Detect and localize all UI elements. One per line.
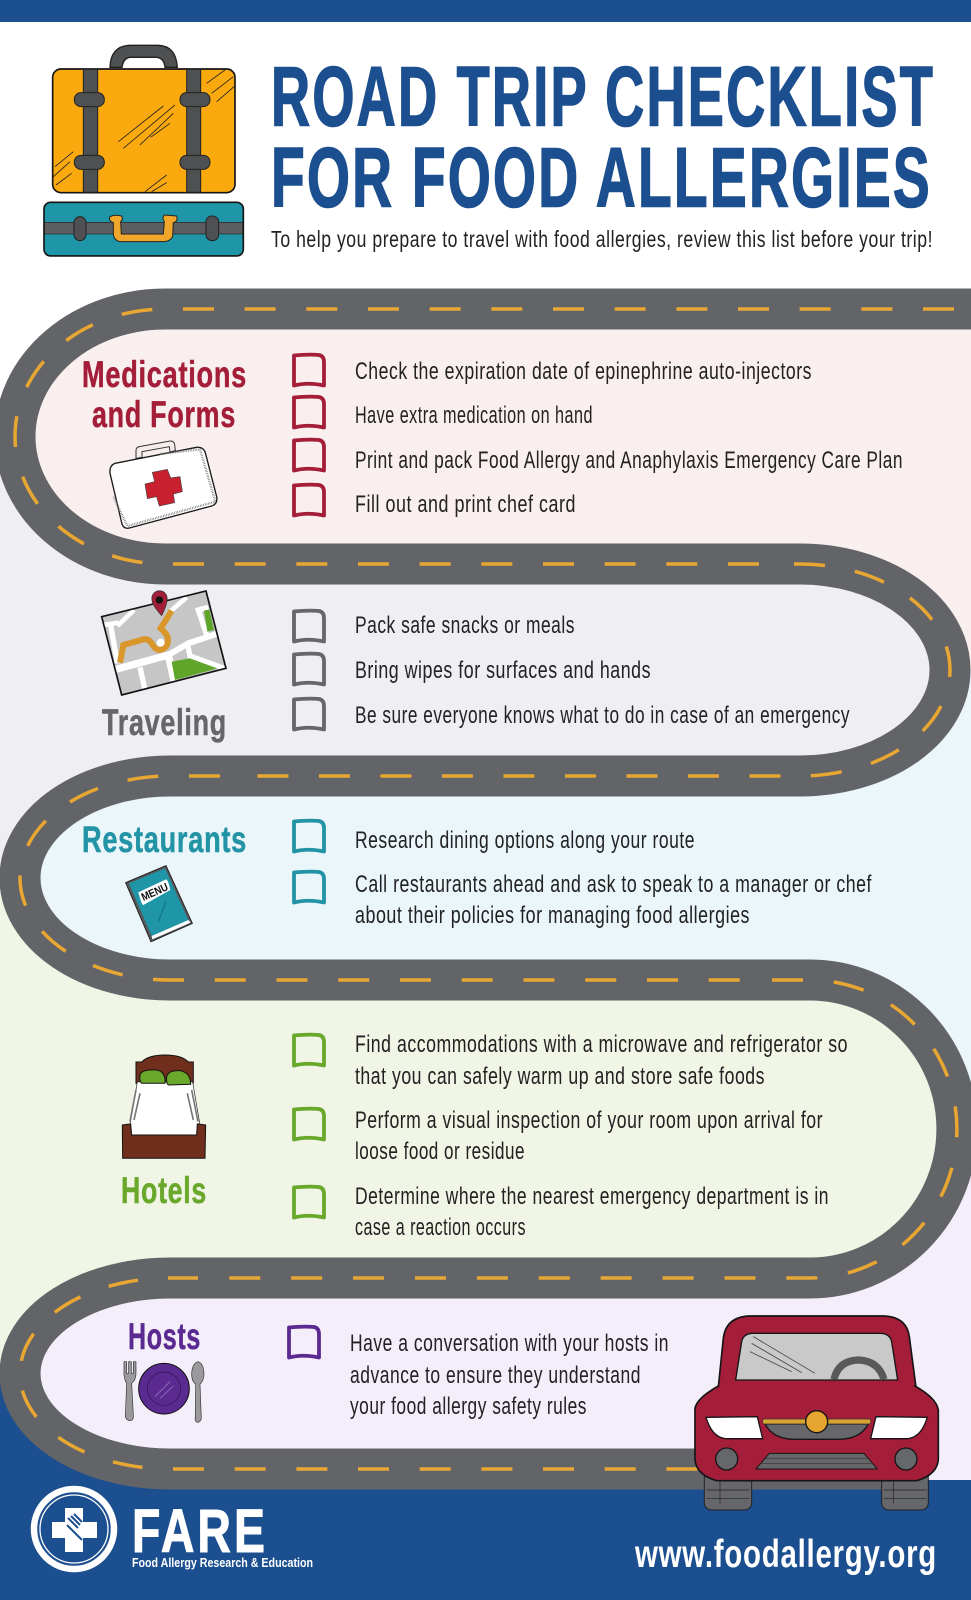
logo: FARE wordmark: Food Allergy Research & Education [132, 1555, 313, 1570]
checklist: hotels: that you can safely warm up and store safe foods [355, 1064, 765, 1090]
icon: map with pin [102, 591, 227, 695]
logo: FARE wordmark: FARE [132, 1497, 268, 1565]
checklist: hotels: loose food or residue [355, 1139, 525, 1165]
logo: FARE emblem [34, 1489, 114, 1569]
heading: medications and forms: and Forms [92, 394, 236, 435]
checklist: medications: Check the expiration date of epinephrine auto-injectors [355, 359, 812, 385]
checklist: hosts: your food allergy safety rules [350, 1394, 587, 1420]
background: restaurants band [20, 670, 971, 1129]
checklist: hotels: case a reaction occurs [355, 1215, 526, 1241]
checklist: restaurants: about their policies for managing food allergies [355, 903, 750, 929]
headlights [706, 1417, 927, 1439]
windshield [736, 1333, 898, 1380]
icon: plate with fork and spoon [124, 1362, 204, 1422]
heading: medications and forms [82, 354, 247, 435]
icon: red car [695, 1316, 938, 1510]
checklist: hosts: Have a conversation with your hosts in [350, 1331, 669, 1357]
heading: hosts: Hosts [128, 1316, 201, 1357]
background: hosts band [20, 1129, 971, 1480]
icon: menu book [126, 866, 192, 942]
checkboxes: medications [294, 355, 324, 516]
car wheels [704, 1477, 928, 1510]
background: medications band [15, 309, 971, 670]
checkboxes: restaurants [294, 821, 324, 902]
heading: restaurants: Restaurants [82, 819, 247, 860]
panel: hotels [121, 1032, 848, 1241]
checklist: hosts: advance to ensure they understand [350, 1363, 641, 1389]
icon: menu book: MENU [140, 881, 170, 904]
checkbox: hosts [289, 1327, 319, 1358]
grille and emblem [765, 1424, 868, 1439]
checklist: traveling: Bring wipes for surfaces and hands [355, 658, 651, 684]
fog lights [716, 1448, 738, 1470]
title [271, 50, 935, 224]
footer background [0, 1374, 971, 1600]
checklist: medications [355, 359, 903, 518]
icon: stacked suitcases [44, 45, 243, 256]
checklist: restaurants [355, 828, 872, 929]
panel: medications and forms [82, 354, 903, 528]
checklist: hosts [350, 1331, 669, 1420]
suitcase handle [110, 45, 177, 67]
icon: bed [122, 1055, 206, 1158]
suitcase straps and buckles [74, 69, 210, 192]
checklist: traveling: Pack safe snacks or meals [355, 613, 575, 639]
car body [695, 1386, 938, 1481]
panel: hosts [124, 1316, 669, 1422]
winding road [15, 309, 971, 1469]
lower grille [756, 1453, 877, 1469]
checklist: medications: Fill out and print chef card [355, 492, 576, 518]
teal suitcase [44, 202, 243, 256]
checklist: medications: Have extra medication on hand [355, 403, 593, 429]
icon: first aid kit [110, 441, 217, 528]
heading: medications and forms: Medications [82, 354, 247, 395]
checkboxes: traveling [294, 611, 324, 730]
checkboxes: hotels [294, 1035, 324, 1218]
heading: traveling: Traveling [102, 702, 227, 743]
car cabin [718, 1316, 916, 1387]
checklist: hotels [355, 1032, 848, 1241]
heading: hotels: Hotels [121, 1170, 207, 1211]
background: hotels band [0, 878, 957, 1374]
steering wheel [834, 1360, 884, 1379]
background: traveling band [0, 436, 950, 878]
top bar [0, 0, 971, 22]
panel: restaurants [82, 819, 872, 942]
checklist: traveling [355, 613, 850, 729]
checklist: hotels: Perform a visual inspection of your room upon arrival for [355, 1108, 823, 1134]
orange suitcase body [53, 69, 235, 193]
checklist: restaurants: Research dining options along your route [355, 828, 695, 854]
panel: traveling [102, 591, 850, 743]
